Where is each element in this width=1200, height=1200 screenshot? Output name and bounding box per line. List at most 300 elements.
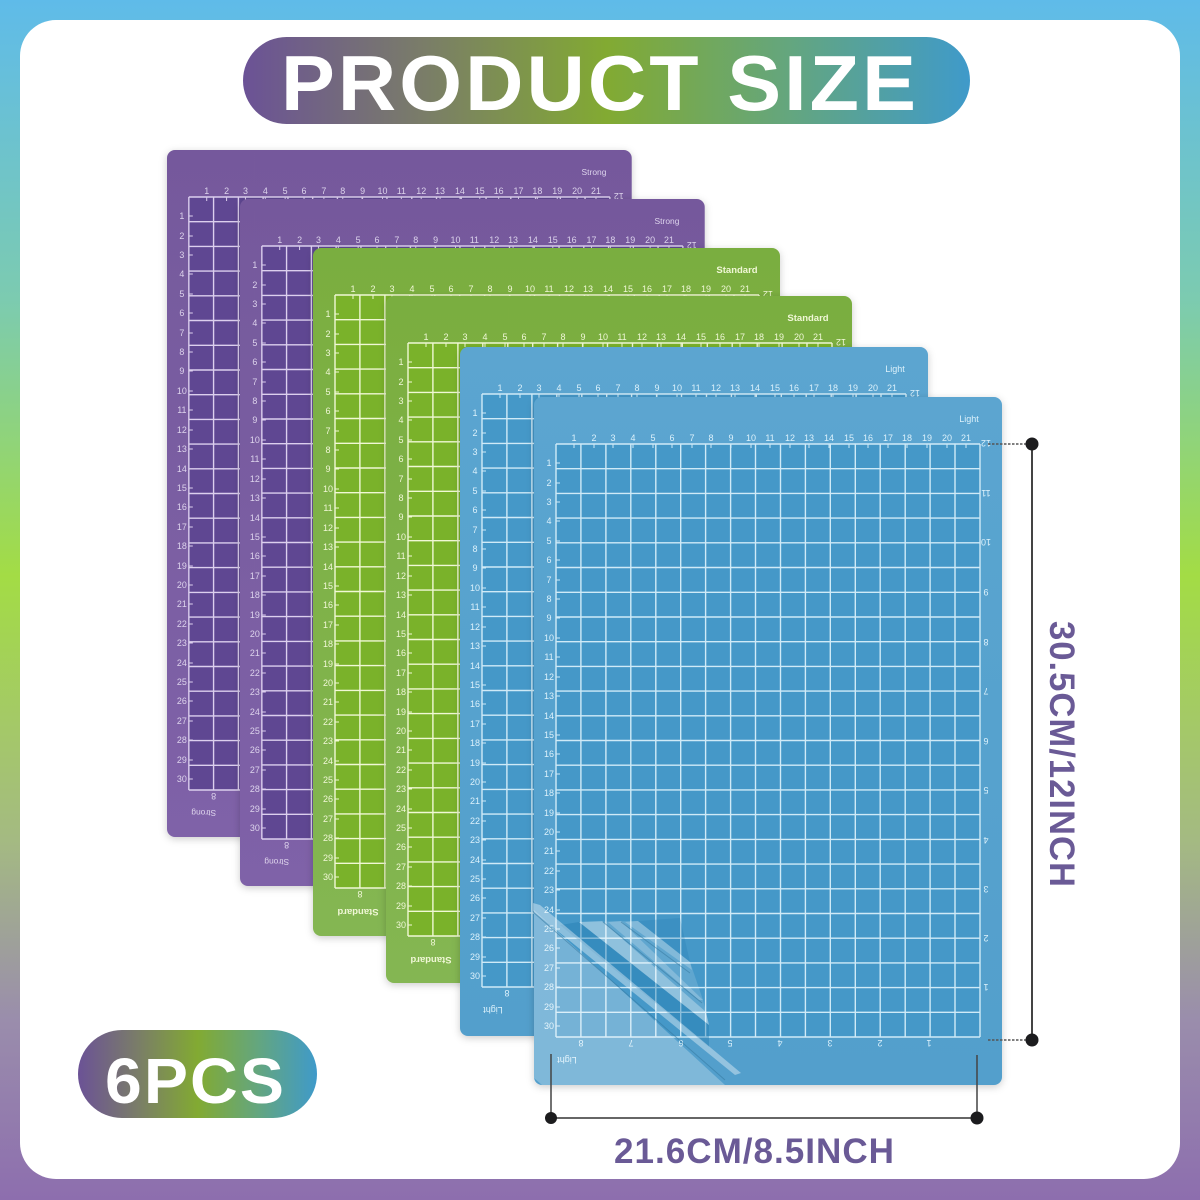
mat: light blue, front: 8 — [546, 594, 552, 604]
mat: standard green, third: 15 — [323, 581, 333, 591]
mat: standard green, third: Standard — [716, 265, 758, 276]
mat: standard green, fourth: 4 — [482, 332, 488, 342]
mat: strong purple, back: 22 — [177, 619, 187, 629]
mat: light blue, front: 4 — [546, 516, 552, 526]
mat: light blue, fifth: 2 — [517, 383, 523, 393]
mat: light blue, fifth: 21 — [887, 383, 897, 393]
mat: standard green, third: 20 — [323, 678, 333, 688]
mat: light blue, fifth: 14 — [470, 661, 480, 671]
mat: standard green, third: 6 — [325, 406, 331, 416]
mat: standard green, fourth: 25 — [396, 823, 406, 833]
mat: light blue, fifth: 13 — [730, 383, 740, 393]
mat: standard green, fourth: 13 — [656, 332, 666, 342]
mat: strong purple, second: 28 — [250, 784, 260, 794]
mat: light blue, fifth: 3 — [536, 383, 542, 393]
mat: strong purple, back: 13 — [435, 186, 445, 196]
mat: strong purple, back: 14 — [455, 186, 465, 196]
mat: standard green, third: 14 — [323, 562, 333, 572]
mat: strong purple, back: 21 — [591, 186, 601, 196]
mat: light blue, front: 20 — [544, 827, 554, 837]
mat: standard green, fourth: 30 — [396, 920, 406, 930]
title pill: PRODUCT SIZE — [281, 39, 919, 127]
mat: light blue, front: 8 — [983, 637, 989, 647]
mat: strong purple, back: 15 — [475, 186, 485, 196]
mat: standard green, fourth: 3 — [462, 332, 468, 342]
mat: light blue, front: 19 — [544, 808, 554, 818]
mat: strong purple, back: 15 — [177, 483, 187, 493]
mat: standard green, fourth: 27 — [396, 862, 406, 872]
mat: standard green, third: 8 — [325, 445, 331, 455]
mat: standard green, third: 7 — [468, 284, 474, 294]
mat: light blue, fifth: 17 — [809, 383, 819, 393]
mat: light blue, fifth: 5 — [472, 486, 478, 496]
mat: light blue, front: 23 — [544, 885, 554, 895]
mat: standard green, third: 2 — [370, 284, 376, 294]
6PCS pill — [78, 1030, 317, 1118]
mat: standard green, third: 4 — [409, 284, 415, 294]
mat: light blue, front: 25 — [544, 924, 554, 934]
mat: strong purple, second: 23 — [250, 687, 260, 697]
mat: standard green, third: 11 — [544, 284, 554, 294]
mat: standard green, fourth: 17 — [735, 332, 745, 342]
mat: light blue, front: 17 — [544, 769, 554, 779]
mat: standard green, fourth: 3 — [398, 396, 404, 406]
mat: light blue, front: 14 — [824, 433, 834, 443]
mat: strong purple, back: 2 — [179, 231, 184, 241]
mat: strong purple, back: 17 — [514, 186, 523, 196]
mat: light blue, front: 24 — [544, 905, 554, 915]
mat: strong purple, second: 24 — [250, 707, 260, 717]
mat: strong purple, back: 26 — [177, 696, 187, 706]
mat: light blue, front: 14 — [544, 711, 554, 721]
mat: light blue, front: 2 — [546, 478, 552, 488]
mat: standard green, third: 24 — [323, 756, 333, 766]
mat: light blue, fifth: 13 — [470, 641, 480, 651]
mat: standard green, third: 10 — [323, 484, 333, 494]
mat: standard green, third: 14 — [603, 284, 613, 294]
mat: strong purple, second: 13 — [508, 235, 518, 245]
mat: standard green, third: Standard — [337, 906, 379, 917]
mat: strong purple, back: 20 — [572, 186, 582, 196]
mat: strong purple, back: 19 — [552, 186, 562, 196]
mat: light blue, front: 2 — [983, 933, 989, 943]
mat: standard green, fourth: 11 — [617, 332, 627, 342]
mat: light blue, fifth: 30 — [470, 971, 480, 981]
mat: light blue, fifth: 7 — [472, 525, 478, 535]
mat: standard green, fourth: 6 — [521, 332, 527, 342]
mat: standard green, third: 3 — [325, 348, 331, 358]
mat: standard green, third: 19 — [323, 659, 333, 669]
mat: light blue, front — [534, 397, 1002, 1085]
mat: strong purple, second: 20 — [645, 235, 655, 245]
mat: standard green, fourth: 17 — [396, 668, 406, 678]
mat: light blue, fifth: 28 — [470, 932, 480, 942]
mat: strong purple, second: 9 — [252, 415, 257, 425]
mat: standard green, fourth: 2 — [443, 332, 449, 342]
mat: strong purple, second: 30 — [250, 823, 260, 833]
mat: light blue, fifth: 5 — [576, 383, 582, 393]
mat: light blue, fifth: 1 — [497, 383, 503, 393]
mat: light blue, fifth: 29 — [470, 952, 480, 962]
mat: standard green, fourth: 1 — [398, 357, 404, 367]
mat: standard green, fourth: 19 — [396, 707, 406, 717]
mat: light blue, fifth: 8 — [504, 988, 510, 998]
dimension: width label: 21.6CM/8.5INCH — [614, 1132, 895, 1171]
mat: light blue, fifth: 11 — [691, 383, 701, 393]
mat: strong purple, back: 12 — [614, 191, 624, 201]
mat: strong purple, second: 17 — [587, 235, 596, 245]
mat: standard green, third: 17 — [662, 284, 672, 294]
mat: light blue, fifth: 8 — [472, 544, 478, 554]
mat: standard green, third: 5 — [429, 284, 435, 294]
mat: strong purple, back: 4 — [179, 269, 184, 279]
mat: strong purple, second: 12 — [489, 235, 499, 245]
mat: light blue, fifth: 23 — [470, 835, 480, 845]
mat: strong purple, second: 19 — [625, 235, 635, 245]
mat: strong purple, second: 11 — [470, 235, 479, 245]
mat: light blue, front: 3 — [983, 884, 989, 894]
mat: standard green, third: 5 — [325, 387, 331, 397]
mat: light blue, front: 7 — [689, 433, 695, 443]
mat: standard green, third — [313, 248, 780, 936]
mat: light blue, front: 13 — [544, 691, 554, 701]
mat: light blue, front: 2 — [591, 433, 597, 443]
mat: strong purple, back: 29 — [177, 755, 187, 765]
mat: standard green, fourth: 14 — [396, 610, 406, 620]
mat: light blue, front: 4 — [777, 1038, 783, 1048]
mat: standard green, third: 9 — [325, 464, 331, 474]
mat: light blue, front: 7 — [983, 686, 989, 696]
mat: strong purple, back: 18 — [532, 186, 542, 196]
mat: standard green, third: 20 — [721, 284, 731, 294]
mat: light blue, front: 7 — [546, 575, 552, 585]
mat: light blue, front: 17 — [883, 433, 893, 443]
mat: strong purple, second: 3 — [252, 299, 257, 309]
mat: light blue, front: 5 — [650, 433, 656, 443]
mat: standard green, third: 13 — [583, 284, 593, 294]
mat: strong purple, back: 9 — [179, 366, 184, 376]
mat: standard green, third: 12 — [564, 284, 574, 294]
mat: light blue, fifth: 19 — [470, 758, 480, 768]
mat: strong purple, second: 4 — [252, 318, 257, 328]
mat: light blue, front: 4 — [630, 433, 636, 443]
mat: standard green, fourth: 13 — [396, 590, 406, 600]
6PCS pill: 6PCS — [105, 1045, 286, 1117]
mat: strong purple, second: 12 — [687, 240, 697, 250]
mat: standard green, fourth — [386, 296, 852, 983]
mat: strong purple, second: 27 — [250, 765, 260, 775]
mat: strong purple, back: 3 — [179, 250, 184, 260]
mat: light blue, front: 10 — [981, 537, 991, 547]
mat: standard green, third: 28 — [323, 833, 333, 843]
mat: strong purple, second: 6 — [375, 235, 380, 245]
mat: light blue, fifth: Light — [885, 364, 905, 374]
mat: standard green, fourth: 12 — [836, 337, 846, 347]
mat: light blue, fifth: 25 — [470, 874, 480, 884]
mat: strong purple, second: 11 — [250, 454, 260, 464]
mat: light blue, fifth — [460, 347, 928, 1036]
mat: standard green, third: 30 — [323, 872, 333, 882]
mat: strong purple, back: 14 — [177, 464, 187, 474]
mat: light blue, front: 12 — [981, 438, 991, 448]
mat: light blue, front: 10 — [544, 633, 554, 643]
mat: strong purple, second: 19 — [250, 610, 260, 620]
mat: standard green, third: 7 — [325, 426, 331, 436]
mat: light blue, front: 5 — [983, 785, 989, 795]
mat: standard green, fourth: 5 — [502, 332, 508, 342]
mat: strong purple, second: 15 — [250, 532, 260, 542]
mat: standard green, third: 6 — [448, 284, 454, 294]
mat: standard green, fourth: 4 — [398, 415, 404, 425]
mat: strong purple, back: 11 — [397, 186, 406, 196]
mat: strong purple, second: 20 — [250, 629, 260, 639]
mat: standard green, third: 17 — [323, 620, 333, 630]
mat: strong purple, second: 2 — [252, 280, 257, 290]
mat: strong purple, back: 10 — [378, 186, 387, 196]
mat: strong purple, back: 1 — [204, 186, 209, 196]
mat: standard green, third: 1 — [350, 284, 356, 294]
mat: light blue, front: 28 — [544, 982, 554, 992]
mat: standard green, third: 10 — [525, 284, 535, 294]
mat: standard green, third: 23 — [323, 736, 333, 746]
mat: light blue, fifth: 4 — [472, 466, 478, 476]
mat: strong purple, back — [167, 150, 632, 837]
mat: strong purple, second: 17 — [250, 571, 260, 581]
mat: standard green, fourth: 29 — [396, 901, 406, 911]
mat: standard green, third: 3 — [389, 284, 395, 294]
mat: light blue, fifth: 16 — [470, 699, 480, 709]
mat: standard green, fourth: Standard — [787, 313, 829, 324]
mat: standard green, fourth: 28 — [396, 881, 406, 891]
mat: standard green, third: 16 — [642, 284, 652, 294]
mat: light blue, fifth: 8 — [634, 383, 640, 393]
mat: strong purple, back: 20 — [177, 580, 187, 590]
mat: strong purple, second: 13 — [250, 493, 260, 503]
mat: standard green, third: 21 — [323, 697, 333, 707]
mat: standard green, third: 13 — [323, 542, 333, 552]
mat: strong purple, second: 5 — [252, 338, 257, 348]
mat: light blue, front: 3 — [827, 1038, 833, 1048]
mat: light blue, fifth: 20 — [868, 383, 878, 393]
mat: strong purple, back: 12 — [177, 425, 187, 435]
mat: strong purple, back: 1 — [179, 211, 184, 221]
mat: light blue, fifth: 15 — [770, 383, 780, 393]
mat: strong purple, back: 19 — [177, 561, 187, 571]
mat: strong purple, back: 3 — [243, 186, 248, 196]
mat: light blue, fifth: 11 — [470, 602, 480, 612]
mat: strong purple, second: 1 — [252, 260, 257, 270]
mat: light blue, front: 15 — [844, 433, 854, 443]
mat: strong purple, back: 21 — [177, 599, 187, 609]
mat: standard green, fourth: 15 — [696, 332, 706, 342]
mat: strong purple, second: 12 — [250, 474, 260, 484]
mat: light blue, front: 13 — [804, 433, 814, 443]
mat: light blue, front: 27 — [544, 963, 554, 973]
mat: standard green, fourth: 9 — [398, 512, 404, 522]
mat: light blue, front: 1 — [926, 1038, 932, 1048]
mat: standard green, third: 15 — [623, 284, 633, 294]
mat: light blue, fifth: 6 — [472, 505, 478, 515]
mat: light blue, front: 12 — [544, 672, 554, 682]
mat: light blue, front: 9 — [546, 613, 552, 623]
mat: strong purple, second — [240, 199, 705, 886]
mat: standard green, fourth: 6 — [398, 454, 404, 464]
mat: light blue, front: 21 — [544, 846, 554, 856]
mat: strong purple, second: 21 — [664, 235, 674, 245]
mat: light blue, fifth: 9 — [472, 563, 478, 573]
mat: standard green, fourth: 14 — [676, 332, 686, 342]
mat: standard green, fourth: 15 — [396, 629, 406, 639]
mat: strong purple, second: 7 — [394, 235, 399, 245]
mat: standard green, fourth: 8 — [398, 493, 404, 503]
mat: light blue, fifth: 2 — [472, 428, 478, 438]
mat: standard green, fourth: 8 — [560, 332, 566, 342]
mat: strong purple, back: 6 — [302, 186, 307, 196]
mat: light blue, front: 5 — [546, 536, 552, 546]
mat: light blue, fifth: 24 — [470, 855, 480, 865]
mat: strong purple, second: 21 — [250, 648, 260, 658]
mat: light blue, front: 22 — [544, 866, 554, 876]
mat: light blue, fifth: 10 — [672, 383, 682, 393]
mat: light blue, fifth: 18 — [470, 738, 480, 748]
mat: light blue, front: 4 — [983, 835, 989, 845]
mat: light blue, front: 6 — [678, 1038, 684, 1048]
mat: strong purple, second: Strong — [655, 216, 680, 226]
mat: standard green, fourth: 20 — [396, 726, 406, 736]
mat: strong purple, second: 4 — [336, 235, 341, 245]
mat: light blue, front: 12 — [785, 433, 795, 443]
mat: strong purple, second: 10 — [250, 435, 260, 445]
mat: standard green, third: 18 — [323, 639, 333, 649]
mat: light blue, fifth: 14 — [750, 383, 760, 393]
mat: light blue, front: Light — [557, 1055, 577, 1065]
mat: standard green, fourth: 16 — [715, 332, 725, 342]
mat: strong purple, back: 8 — [211, 791, 216, 801]
mat: light blue, front: 5 — [727, 1038, 733, 1048]
mat: light blue, fifth: 22 — [470, 816, 480, 826]
mat: strong purple, second: 3 — [316, 235, 321, 245]
mat: strong purple, back: 8 — [340, 186, 345, 196]
mat: light blue, front: 11 — [765, 433, 775, 443]
mat: standard green, fourth: 19 — [774, 332, 784, 342]
mat: light blue, front: 18 — [544, 788, 554, 798]
mat: standard green, third: 2 — [325, 329, 331, 339]
mat: strong purple, back: 4 — [263, 186, 268, 196]
mat: strong purple, back: 16 — [177, 502, 187, 512]
mat: light blue, front: 20 — [942, 433, 952, 443]
mat: strong purple, second: 10 — [451, 235, 460, 245]
mat: standard green, third: 1 — [325, 309, 331, 319]
mat: standard green, fourth: 12 — [637, 332, 647, 342]
mat: light blue, fifth: 4 — [556, 383, 562, 393]
mat: strong purple, back: 8 — [179, 347, 184, 357]
mat: standard green, fourth: 16 — [396, 648, 406, 658]
mat: strong purple, second: 15 — [548, 235, 558, 245]
mat: light blue, front: 15 — [544, 730, 554, 740]
mat: light blue, fifth: 26 — [470, 893, 480, 903]
mat: strong purple, back: 30 — [177, 774, 187, 784]
mat: standard green, fourth: 18 — [396, 687, 406, 697]
mat: standard green, fourth: 10 — [598, 332, 608, 342]
mat: standard green, third: 8 — [357, 889, 363, 899]
mat: light blue, front: 1 — [983, 982, 989, 992]
mat: light blue, front: 7 — [628, 1038, 634, 1048]
mat: strong purple, back: 28 — [177, 735, 187, 745]
mat: light blue, front: 9 — [728, 433, 734, 443]
mat: standard green, fourth: 21 — [813, 332, 823, 342]
mat: standard green, third: 19 — [701, 284, 711, 294]
mat: strong purple, back: 17 — [177, 522, 187, 532]
mat: strong purple, second: 8 — [284, 840, 289, 850]
mat: strong purple, second: 25 — [250, 726, 260, 736]
mat: light blue, fifth: 21 — [470, 796, 480, 806]
mat: light blue, fifth: 20 — [470, 777, 480, 787]
mat: light blue, fifth: 19 — [848, 383, 858, 393]
mat: strong purple, second: 18 — [605, 235, 615, 245]
mat: standard green, third: 22 — [323, 717, 333, 727]
mat: strong purple, second: 16 — [250, 551, 260, 561]
mat: standard green, third: 29 — [323, 853, 333, 863]
mat: strong purple, back: 6 — [179, 308, 184, 318]
mat: light blue, fifth: 6 — [595, 383, 601, 393]
mat: strong purple, second: 8 — [413, 235, 418, 245]
mat: strong purple, second: 29 — [250, 804, 260, 814]
mat: light blue, front: 3 — [546, 497, 552, 507]
mat: light blue, fifth: 12 — [910, 388, 920, 398]
mat: light blue, front: 1 — [546, 458, 552, 468]
mat: light blue, front: 2 — [877, 1038, 883, 1048]
mat: light blue, front: 29 — [544, 1002, 554, 1012]
mat: standard green, fourth: 24 — [396, 804, 406, 814]
mat: light blue, fifth: 17 — [470, 719, 480, 729]
mat: strong purple, second: 18 — [250, 590, 260, 600]
mat: light blue, fifth: 15 — [470, 680, 480, 690]
mat: strong purple, back: 10 — [177, 386, 187, 396]
mat: light blue, front: 19 — [922, 433, 932, 443]
mat: standard green, fourth: 21 — [396, 745, 406, 755]
mat: standard green, fourth: 8 — [430, 937, 436, 947]
mat: strong purple, back: Strong — [191, 808, 216, 818]
mat: standard green, fourth: 11 — [396, 551, 406, 561]
mat: strong purple, back: 9 — [360, 186, 365, 196]
mat: light blue, front: 16 — [863, 433, 873, 443]
mat: standard green, third: 4 — [325, 367, 331, 377]
mat: standard green, third: 18 — [681, 284, 691, 294]
mat: light blue, fifth: 27 — [470, 913, 480, 923]
mat: strong purple, second: 22 — [250, 668, 260, 678]
mat: light blue, front: 11 — [981, 488, 991, 498]
mat: light blue, front: 18 — [902, 433, 912, 443]
mat: strong purple, back: 2 — [224, 186, 229, 196]
mat: strong purple, back: 7 — [321, 186, 326, 196]
mat: strong purple, second: 16 — [567, 235, 577, 245]
mat: light blue, front: 10 — [746, 433, 756, 443]
mat: light blue, fifth: 1 — [472, 408, 478, 418]
mat: standard green, fourth: 23 — [396, 784, 406, 794]
mat: light blue, fifth: 3 — [472, 447, 478, 457]
mat: light blue, front: 9 — [983, 587, 989, 597]
mat: light blue, front: 6 — [669, 433, 675, 443]
mat: standard green, fourth: 2 — [398, 377, 404, 387]
mat: strong purple, back: 12 — [416, 186, 426, 196]
mat: standard green, fourth: 12 — [396, 571, 406, 581]
mat: light blue, front: Light — [959, 414, 979, 424]
mat: light blue, fifth: 12 — [711, 383, 721, 393]
mat: light blue, front: 8 — [708, 433, 714, 443]
mat: light blue, fifth: Light — [483, 1005, 503, 1015]
mat: light blue, front: 11 — [544, 652, 554, 662]
mat: strong purple, second: 6 — [252, 357, 257, 367]
